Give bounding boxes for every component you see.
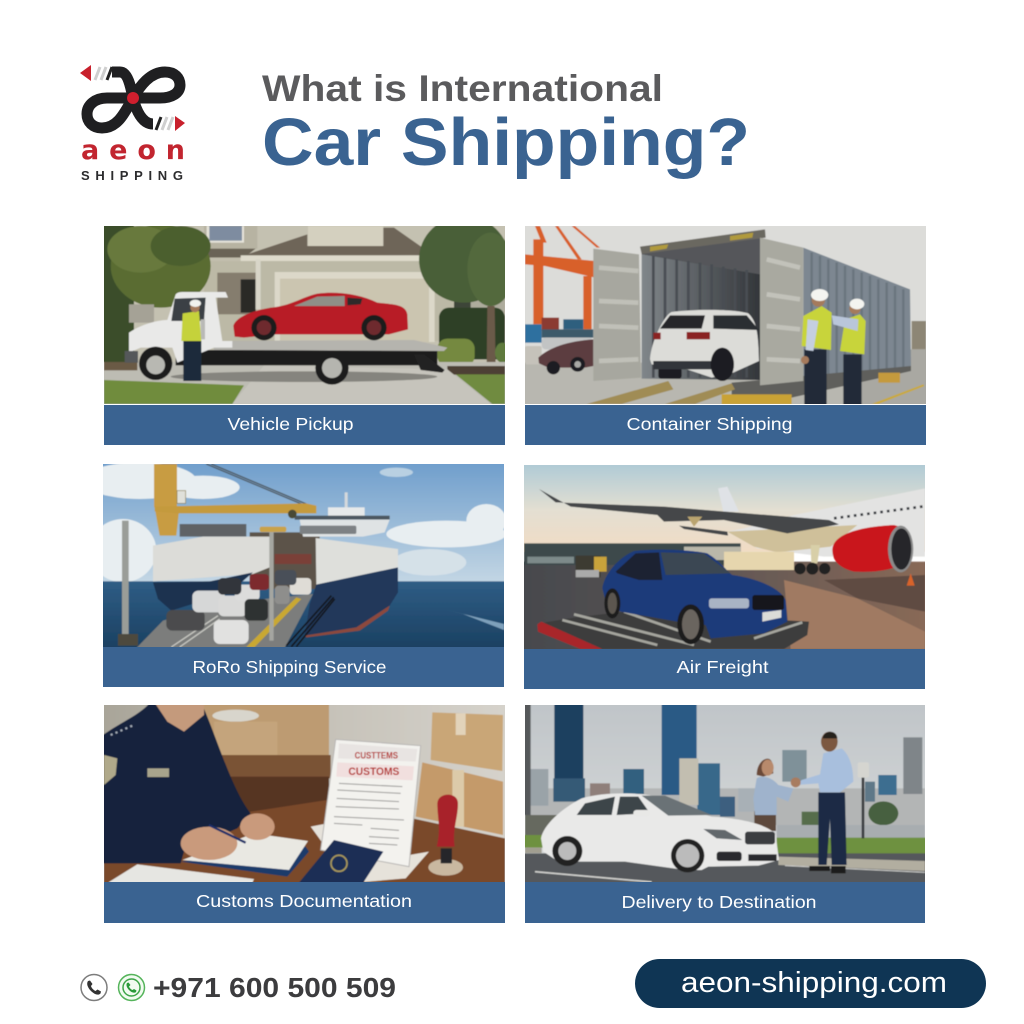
caption bar [104,405,505,445]
fuselage [727,488,925,557]
customs form [321,739,421,867]
red sports car [233,293,408,340]
deck stripes and hoses [171,596,335,647]
deck ramp [136,594,313,648]
right tree and hedges [418,226,505,362]
customs form: CUSTOMS [348,766,399,778]
lawns [522,835,927,862]
passport [296,840,383,887]
logo arrows [80,65,185,131]
tail fin [718,487,739,512]
stacked containers [525,318,593,343]
river band [777,825,925,838]
white SUV [650,310,759,381]
white sedan [541,793,779,872]
clouds [83,462,506,582]
panel: roro shipping [83,457,511,687]
sea [96,581,511,651]
parked cars [525,338,593,374]
container top frame [640,229,766,254]
logo tagline: SHIPPING [81,168,183,183]
panel: vehicle pickup [97,216,514,445]
logo wordmark: aeon [81,135,185,166]
officer [101,702,251,863]
desk [104,800,505,887]
panel: container shipping [518,219,933,445]
website pill [635,959,986,1008]
flatbed [176,340,447,373]
caption: RoRo Shipping Service [192,657,386,677]
logo mark [87,72,180,128]
truck cab [125,292,232,380]
contact phone [81,972,396,1003]
caption: Vehicle Pickup [228,414,354,434]
logo centre dot [127,92,139,104]
ground [104,361,505,404]
blue sedan [602,550,787,644]
ship centre with loaded cars [180,524,320,589]
port crane [525,226,600,329]
photo: handover beside white car [518,698,933,890]
right boxes [416,712,503,835]
woman [753,759,793,831]
right door [760,238,803,385]
title [262,68,750,180]
caption: Container Shipping [626,414,792,434]
phone number: +971 600 500 509 [153,972,396,1003]
caption bar [525,882,925,923]
service vehicles [576,552,794,577]
left tree [104,226,212,363]
caption: Delivery to Destination [622,892,816,912]
caption bar [525,405,926,445]
inspector 1 [801,289,832,406]
papers under document [311,823,429,882]
rubber stamp [428,795,463,876]
road and kerb [518,848,933,887]
photo: RoRo ship loading cars [103,464,504,647]
photo: car beside cargo plane [517,458,932,655]
lamp post [858,762,869,838]
website url: aeon-shipping.com [681,967,947,999]
terminal [524,543,741,565]
icon: phone [81,974,107,1000]
panel: air freight [517,458,932,689]
landing gear [794,545,830,575]
man [791,732,853,873]
forms on desk [109,833,309,887]
inspector 2 [832,299,866,406]
worker in hi-vis vest [181,300,205,381]
traffic cone [907,573,915,586]
wooden ramps [587,381,735,404]
container interior [642,231,760,380]
back shelf and boxes [201,702,331,813]
caption: Air Freight [676,657,769,677]
lamp pole [260,527,286,641]
logo: aeon shipping [80,65,185,183]
title line 1: What is International [262,68,663,109]
pen [209,825,246,843]
title line 2: Car Shipping? [262,105,750,180]
caption bar [103,647,504,687]
caption bar [524,649,925,689]
container base and pallets [722,366,924,404]
customs form: CUSTTEMS [355,750,398,760]
cars on deck [166,570,311,644]
photo: SUV loaded into a container [518,219,933,411]
crane [154,464,316,536]
caption bar [104,882,505,923]
left door [593,249,641,381]
photo: customs officer with documents [97,698,512,890]
icon: whatsapp [118,974,144,1000]
white hull and navy hull [153,537,398,637]
mast [118,521,138,646]
superstructure [295,492,390,537]
panel: customs documentation [97,698,512,923]
pill background [635,959,986,1008]
skyline [522,702,925,835]
hands [181,813,275,860]
panel: delivery to destination [518,698,933,923]
container side wall [803,248,911,391]
photo: flatbed truck with red car [104,226,505,404]
wing [539,489,839,536]
rear wheel [314,357,350,386]
red engine [832,525,913,572]
caption: Customs Documentation [196,891,412,911]
trailer [537,612,809,649]
